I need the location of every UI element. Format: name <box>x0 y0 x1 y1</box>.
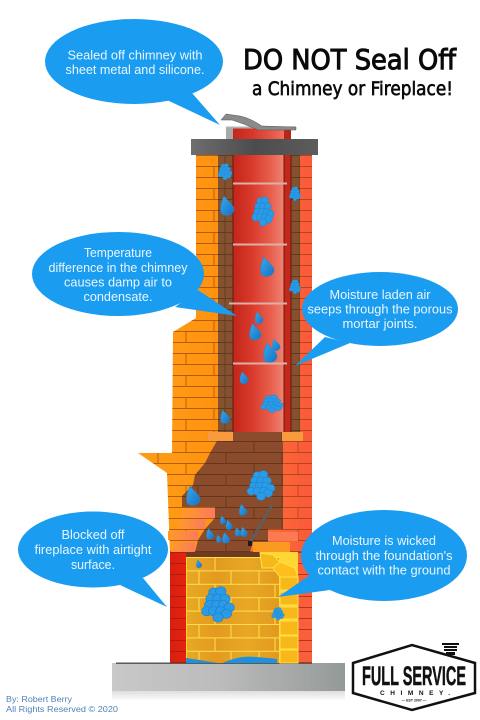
callout: moisture laden air: seeps through the porous <box>308 302 453 316</box>
pooled water <box>186 657 277 663</box>
logo badge outline <box>353 645 475 710</box>
title: a Chimney or Fireplace! <box>252 78 453 100</box>
sealed fireplace surface <box>186 552 298 663</box>
ledge bricks under flue <box>208 432 303 441</box>
title: DO NOT Seal Off <box>243 43 457 76</box>
callout: temperature difference: Temperature <box>84 245 152 260</box>
left flue cavity <box>218 155 233 432</box>
callout: moisture wicked through foundation: Moisture is wicked <box>332 533 436 548</box>
left lower wall <box>170 552 186 663</box>
metal rod <box>248 505 272 546</box>
callout: moisture wicked through foundation: contact with the ground <box>318 562 450 578</box>
hearth foundation <box>112 662 345 701</box>
flue liner <box>229 155 291 432</box>
sheet metal seal <box>221 114 296 139</box>
broken brick edges <box>168 508 298 552</box>
callout: moisture wicked through foundation <box>278 510 467 601</box>
logo subtitle: CHIMNEY. <box>380 690 450 697</box>
right flue cavity <box>291 155 300 432</box>
moisture droplets <box>187 163 301 622</box>
callout: moisture laden air: Moisture laden air <box>330 287 431 302</box>
exposed damp brick interior <box>182 441 283 552</box>
callout: sealed off chimney <box>45 19 223 125</box>
logo established line: — EST 2007 — <box>402 698 427 702</box>
credit text: All Rights Reserved © 2020 <box>6 704 118 714</box>
chimney structure <box>138 114 318 663</box>
callout: temperature difference: causes damp air to <box>64 274 172 290</box>
callout: moisture wicked through foundation: through the foundation's <box>316 548 453 563</box>
callout: sealed off chimney: sheet metal and silicone. <box>66 62 204 77</box>
title <box>243 43 457 100</box>
brick wall <box>138 155 312 552</box>
callout: temperature difference: difference in the chimney <box>48 260 188 275</box>
callout: blocked off fireplace: surface. <box>71 557 115 572</box>
credit text: By: Robert Berry <box>6 694 73 704</box>
credit text <box>6 694 118 714</box>
callout: sealed off chimney: Sealed off chimney with <box>68 48 202 62</box>
callout: blocked off fireplace: fireplace with airtight <box>34 542 152 557</box>
callout: temperature difference <box>32 232 237 316</box>
callout: blocked off fireplace: Blocked off <box>62 527 125 542</box>
logo chimney icon <box>442 643 459 655</box>
callout: blocked off fireplace <box>18 512 168 607</box>
callout: temperature difference: condensate. <box>84 289 152 304</box>
right lower wall <box>298 552 312 663</box>
logo: Full Service Chimney <box>353 643 475 710</box>
chimney cap <box>191 139 318 155</box>
callout: moisture laden air <box>295 272 458 366</box>
callout: moisture laden air: mortar joints. <box>342 316 418 331</box>
